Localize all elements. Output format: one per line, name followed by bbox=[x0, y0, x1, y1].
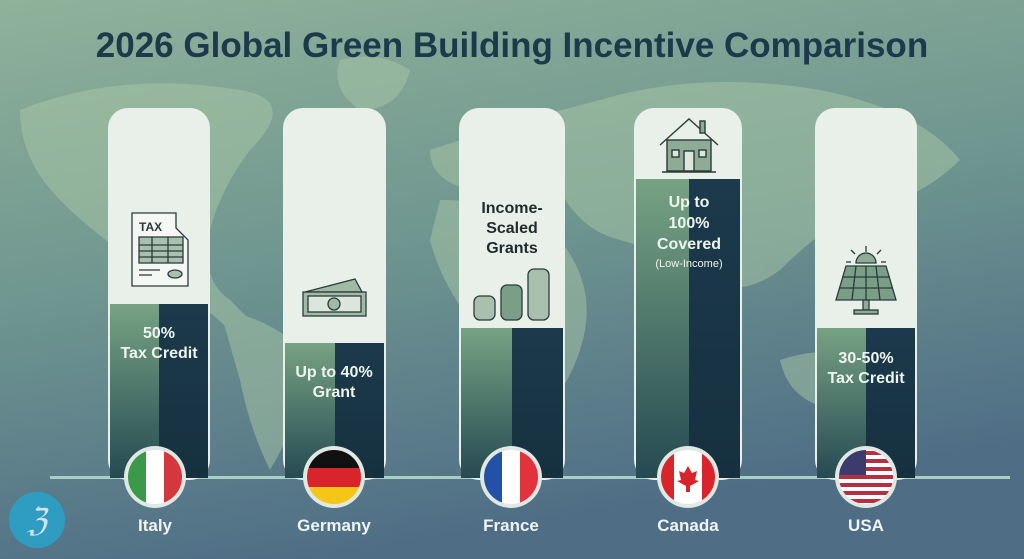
logo bbox=[9, 492, 65, 548]
world map bbox=[20, 57, 960, 470]
panel: France: Scaled bbox=[486, 220, 538, 237]
label: France: France bbox=[483, 516, 539, 535]
panel: Canada: Covered bbox=[657, 236, 721, 253]
panel: Canada: 100% bbox=[669, 215, 709, 232]
logo: ℨ bbox=[27, 502, 49, 538]
label: France value: Income- bbox=[481, 200, 543, 217]
icon: tax form: TAX bbox=[139, 220, 162, 234]
flag: USA bbox=[835, 446, 897, 508]
panel: Germany: Grant bbox=[313, 384, 356, 401]
label: Canada: Canada bbox=[657, 516, 719, 535]
flag: Canada bbox=[657, 446, 719, 508]
label: USA value: 30-50% bbox=[838, 350, 894, 367]
panel: Canada: (Low-Income) bbox=[655, 258, 723, 270]
panel: France bbox=[459, 108, 565, 480]
icon: house bbox=[660, 119, 718, 172]
icon: tax form bbox=[132, 213, 188, 286]
label: Germany: Germany bbox=[297, 516, 371, 535]
panel: USA bbox=[815, 108, 917, 480]
title: 2026 Global Green Building Incentive Comparison bbox=[96, 26, 928, 65]
panel: Canada bbox=[634, 108, 742, 480]
flag: France bbox=[480, 446, 542, 508]
flag: Germany bbox=[303, 446, 365, 508]
icon: solar panel bbox=[836, 246, 896, 314]
icon: coins bbox=[474, 269, 549, 320]
panel: Italy bbox=[108, 108, 210, 480]
label: Italy value: 50% bbox=[143, 325, 175, 342]
flag: Italy bbox=[124, 446, 186, 508]
baseline bbox=[50, 476, 1010, 479]
icon: money bbox=[303, 279, 366, 316]
panel: Germany bbox=[283, 108, 386, 480]
label: Canada value: Up to bbox=[669, 194, 710, 211]
label: Germany value: Up to 40% bbox=[295, 364, 373, 381]
panel: France: Grants bbox=[486, 240, 538, 257]
label: Italy: Italy bbox=[138, 516, 173, 535]
panel: USA: Tax Credit bbox=[827, 370, 905, 387]
panel: Italy: Tax Credit bbox=[120, 345, 198, 362]
label: USA: USA bbox=[848, 516, 884, 535]
